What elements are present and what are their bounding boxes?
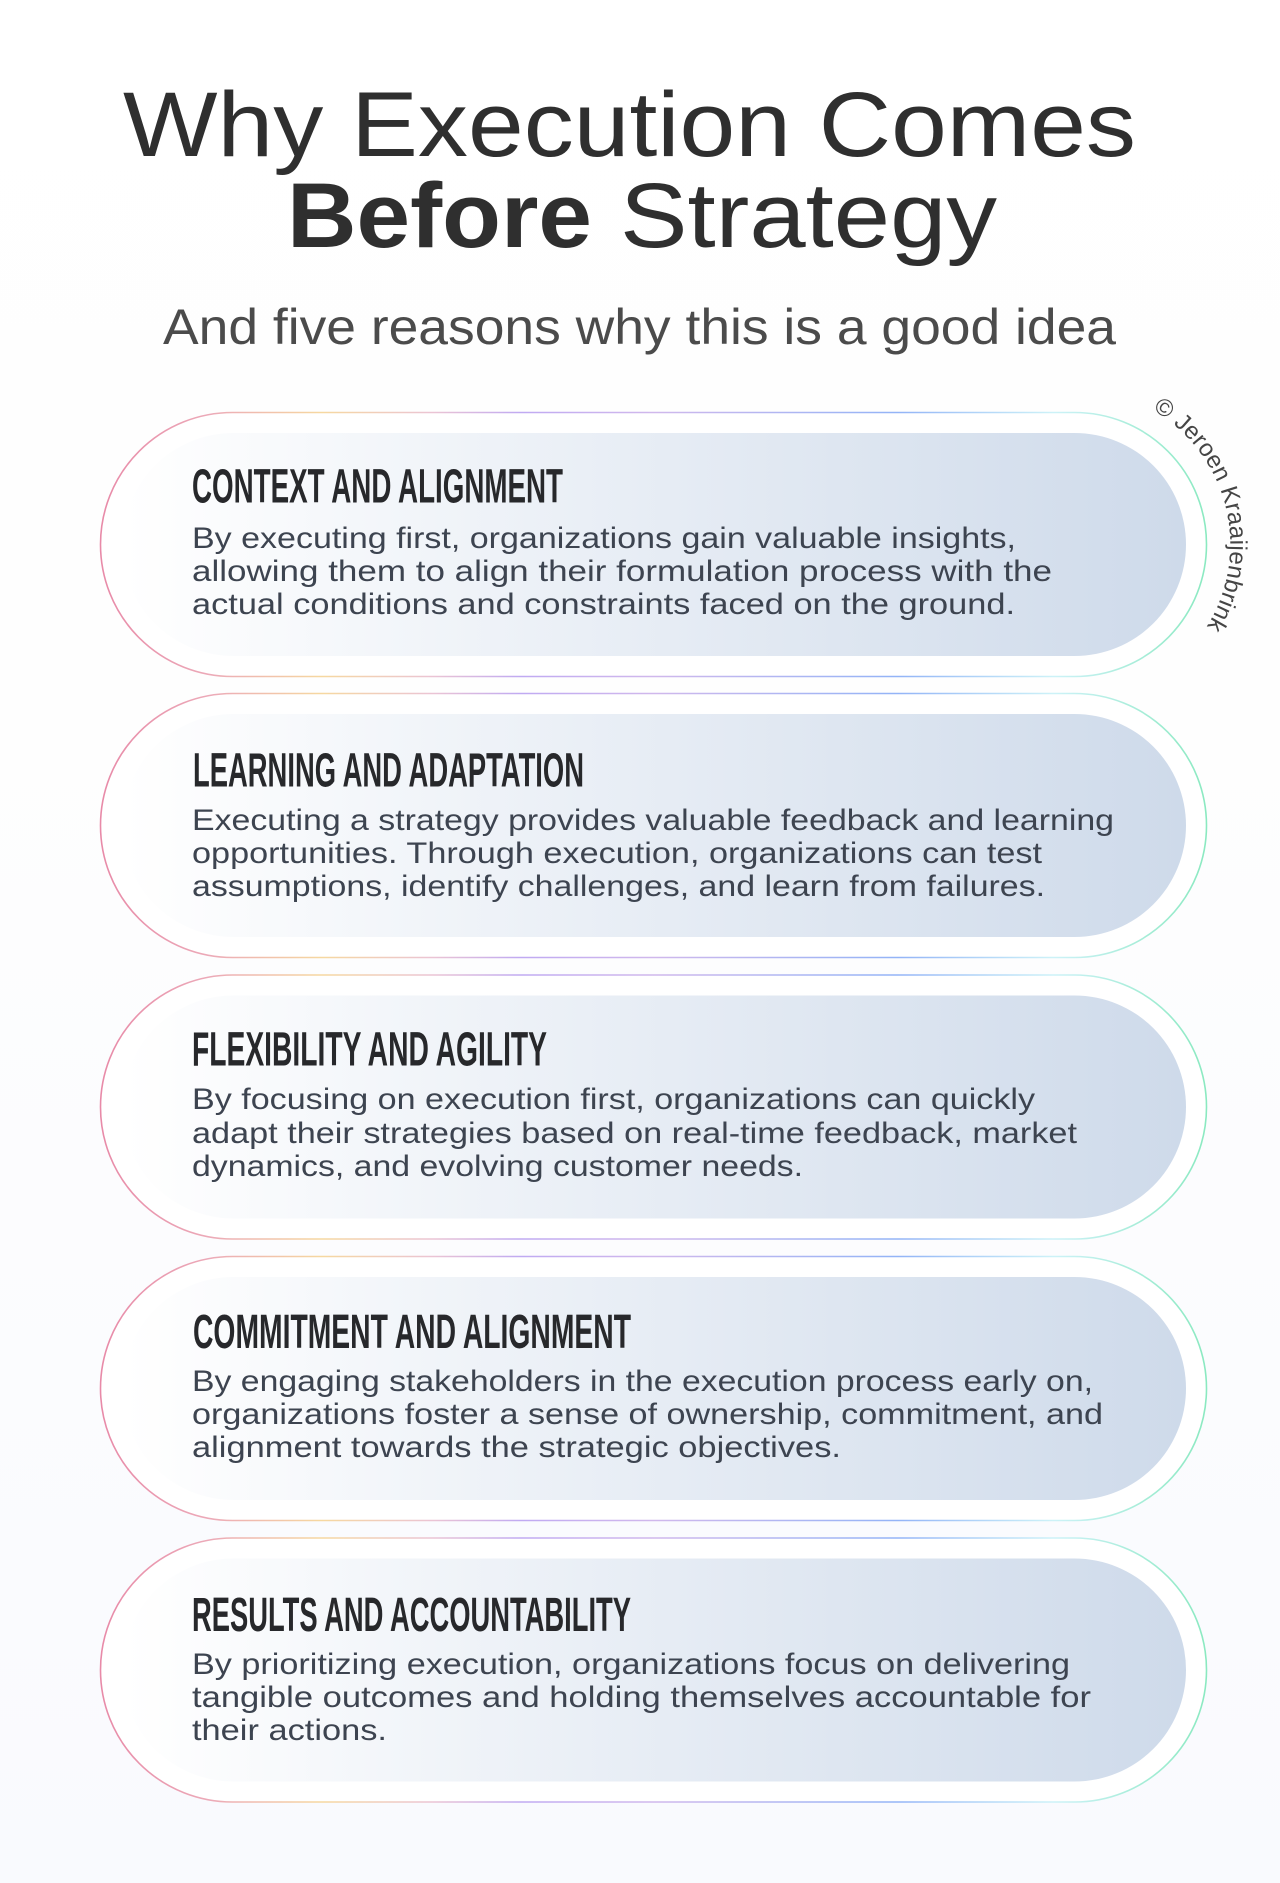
card: commitment and alignment	[100, 1256, 1206, 1520]
card text: alignment towards the strategic objectives.	[192, 1431, 841, 1464]
title: Strategy	[620, 165, 997, 267]
card text: assumptions, identify challenges, and learn from failures.	[192, 870, 1045, 903]
copyright credit on arc: © Jeroen Kraaijenbrink	[1156, 399, 1248, 632]
card text	[192, 522, 1052, 621]
card text: By engaging stakeholders in the execution process early on,	[192, 1365, 1093, 1398]
card heading: FLEXIBILITY AND AGILITY	[192, 1024, 547, 1076]
card text	[192, 804, 1114, 903]
card: context and alignment	[100, 412, 1206, 676]
card: learning and adaptation	[100, 694, 1206, 958]
card text: their actions.	[192, 1714, 387, 1747]
card text: dynamics, and evolving customer needs.	[192, 1150, 803, 1183]
card text: opportunities. Through execution, organizations can test	[192, 837, 1043, 870]
title: Before	[287, 165, 592, 267]
card text: allowing them to align their formulation process with the	[192, 555, 1052, 588]
card text	[192, 1083, 1078, 1183]
card text	[192, 1648, 1091, 1747]
card text: By executing first, organizations gain valuable insights,	[192, 522, 1016, 555]
card: flexibility and agility	[100, 975, 1206, 1239]
card text: Executing a strategy provides valuable feedback and learning	[192, 804, 1114, 837]
card text: By focusing on execution first, organizations can quickly	[192, 1083, 1035, 1116]
title	[123, 74, 1136, 267]
card: results and accountability	[100, 1538, 1206, 1802]
card heading: CONTEXT AND ALIGNMENT	[192, 460, 563, 514]
subtitle: And five reasons why this is a good idea	[163, 299, 1116, 355]
card text	[192, 1365, 1103, 1464]
card text: organizations foster a sense of ownership, commitment, and	[192, 1398, 1103, 1431]
card heading: LEARNING AND ADAPTATION	[193, 744, 584, 798]
card text: By prioritizing execution, organizations focus on delivering	[192, 1648, 1070, 1681]
card text: actual conditions and constraints faced on the ground.	[192, 588, 1015, 621]
title: Why Execution Comes	[123, 74, 1136, 176]
card text: adapt their strategies based on real-time feedback, market	[192, 1117, 1078, 1150]
card text: tangible outcomes and holding themselves accountable for	[192, 1681, 1091, 1714]
card heading: RESULTS AND ACCOUNTABILITY	[192, 1589, 631, 1642]
card heading: COMMITMENT AND ALIGNMENT	[193, 1306, 631, 1359]
